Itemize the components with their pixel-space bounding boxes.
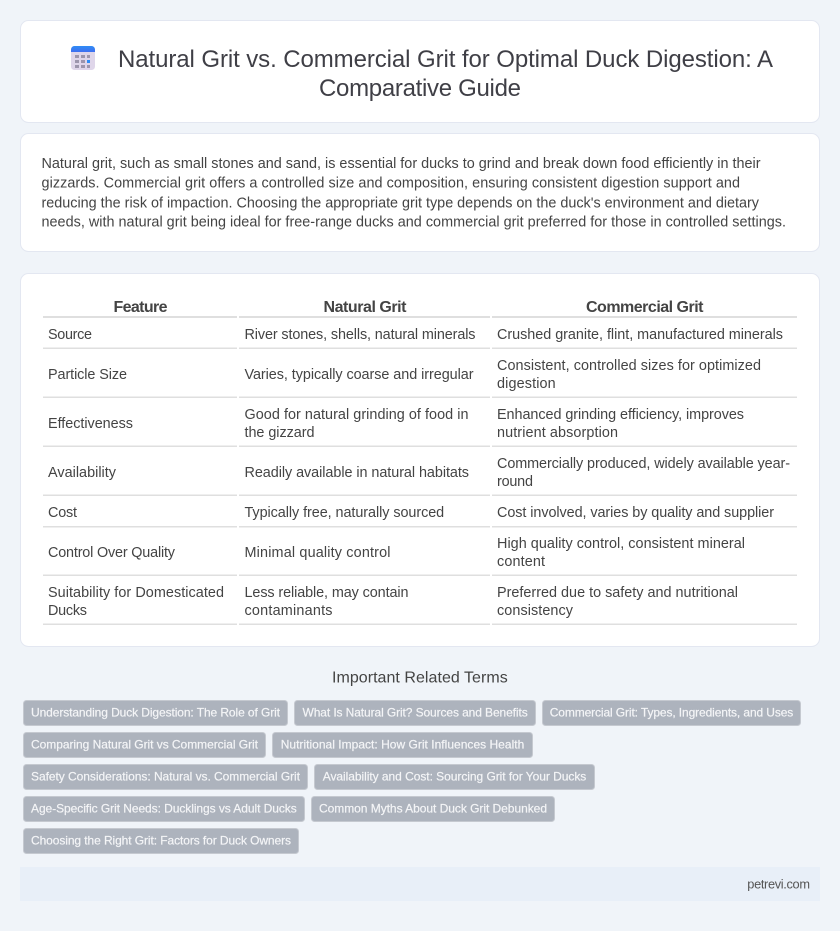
- table row: effectiveness: [43, 407, 797, 447]
- table row: source: River stones, shells, natural minerals: [244, 327, 476, 343]
- tag: nutritional impact: [272, 732, 532, 758]
- panel: header: [20, 20, 820, 122]
- tag: understanding duck digestion: [24, 700, 288, 726]
- table row: source: [43, 327, 797, 349]
- tag: common myths: Common Myths About Duck Grit Debunked: [319, 802, 547, 816]
- tag: safety considerations: [24, 764, 308, 790]
- table row: suitability for domesticated ducks: Ducks: [48, 603, 87, 619]
- tag: age-specific grit needs: [24, 796, 304, 822]
- tag: choosing the right grit: Choosing the Right Grit: Factors for Duck Owners: [31, 834, 291, 848]
- intro text block: Natural grit, such as small stones and sand, is essential for ducks to grind and break down food efficiently in their: [42, 156, 761, 172]
- table row: suitability for domesticated ducks: [43, 585, 797, 625]
- table row: suitability for domesticated ducks: consistency: [497, 603, 574, 619]
- icon: calendar grid: [71, 46, 95, 70]
- title: Natural Grit vs. Commercial Grit for Optimal Duck Digestion: A: [118, 46, 773, 73]
- table row: cost: Cost: [48, 505, 77, 521]
- heading: important related terms: Important Related Terms: [332, 670, 508, 686]
- footer: petrevi.com: [747, 876, 810, 891]
- tag: nutritional impact: Nutritional Impact: How Grit Influences Health: [281, 738, 524, 752]
- table row: source: Crushed granite, flint, manufactured minerals: [497, 327, 783, 343]
- tag: comparing grit: [24, 732, 266, 758]
- table row: effectiveness: Effectiveness: [48, 416, 133, 432]
- table row: suitability for domesticated ducks: Preferred due to safety and nutritional: [497, 585, 738, 601]
- panel: introduction: [20, 134, 820, 252]
- table row: control over quality: High quality control, consistent mineral: [497, 536, 745, 552]
- intro text block: needs, with natural grit being ideal for free-range ducks and commercial grit preferred for those in controlled settings.: [42, 214, 786, 230]
- panel: comparison table: [20, 274, 820, 646]
- tag: commercial grit types: [542, 700, 800, 726]
- tag: common myths: [312, 796, 554, 822]
- table row: suitability for domesticated ducks: contaminants: [244, 603, 332, 619]
- intro text block: gizzards. Commercial grit offers a controlled size and composition, ensuring consistent digestion support and: [42, 176, 740, 192]
- table header row: Natural Grit: [324, 299, 407, 316]
- table row: effectiveness: Good for natural grinding of food in: [244, 407, 468, 423]
- table row: availability: Commercially produced, widely available year-: [497, 456, 790, 472]
- table row: effectiveness: nutrient absorption: [497, 425, 618, 441]
- tag: availability and cost: Availability and Cost: Sourcing Grit for Your Ducks: [323, 770, 586, 784]
- tag: age-specific grit needs: Age-Specific Grit Needs: Ducklings vs Adult Ducks: [31, 802, 297, 816]
- table row: suitability for domesticated ducks: Less reliable, may contain: [244, 585, 408, 601]
- tag: commercial grit types: Commercial Grit: Types, Ingredients, and Uses: [550, 706, 793, 720]
- table row: availability: Availability: [48, 465, 117, 481]
- tag: understanding duck digestion: Understanding Duck Digestion: The Role of Grit: [31, 706, 281, 720]
- table header row: Feature: [114, 299, 168, 316]
- tag: what is natural grit: [294, 700, 536, 726]
- table row: effectiveness: the gizzard: [244, 425, 314, 441]
- table row: control over quality: [43, 536, 797, 576]
- table row: cost: Typically free, naturally sourced: [244, 505, 444, 521]
- tag: what is natural grit: What Is Natural Grit? Sources and Benefits: [302, 706, 528, 720]
- table row: particle size: [43, 358, 797, 398]
- tag: availability and cost: [314, 764, 594, 790]
- title: Comparative Guide: [319, 75, 521, 102]
- tag: safety considerations: Safety Considerations: Natural vs. Commercial Grit: [31, 770, 301, 784]
- table header row: [43, 299, 797, 318]
- table row: cost: Cost involved, varies by quality and supplier: [497, 505, 774, 521]
- table row: suitability for domesticated ducks: Suitability for Domesticated: [48, 585, 224, 601]
- tag: choosing the right grit: [24, 828, 298, 854]
- table row: effectiveness: Enhanced grinding efficiency, improves: [497, 407, 744, 423]
- title: [118, 46, 773, 102]
- table row: particle size: Varies, typically coarse and irregular: [244, 367, 474, 383]
- table row: availability: [43, 456, 797, 496]
- footer: [20, 867, 820, 901]
- table row: control over quality: content: [497, 554, 545, 570]
- table row: cost: [43, 505, 797, 528]
- intro text block: [42, 156, 786, 230]
- table row: particle size: Particle Size: [48, 367, 127, 383]
- table row: availability: Readily available in natural habitats: [244, 465, 469, 481]
- table row: source: Source: [48, 327, 92, 343]
- table row: control over quality: Control Over Quality: [48, 545, 176, 561]
- intro text block: reducing the risk of impaction. Choosing the appropriate grit type depends on the duck's environment and dietary: [42, 196, 760, 212]
- tag: comparing grit: Comparing Natural Grit vs Commercial Grit: [31, 738, 259, 752]
- table row: particle size: digestion: [497, 376, 556, 392]
- table header row: Commercial Grit: [586, 299, 704, 316]
- table row: availability: round: [497, 474, 533, 490]
- table row: particle size: Consistent, controlled sizes for optimized: [497, 358, 761, 374]
- panel: related term tags: [24, 700, 800, 854]
- table row: control over quality: Minimal quality control: [244, 545, 390, 561]
